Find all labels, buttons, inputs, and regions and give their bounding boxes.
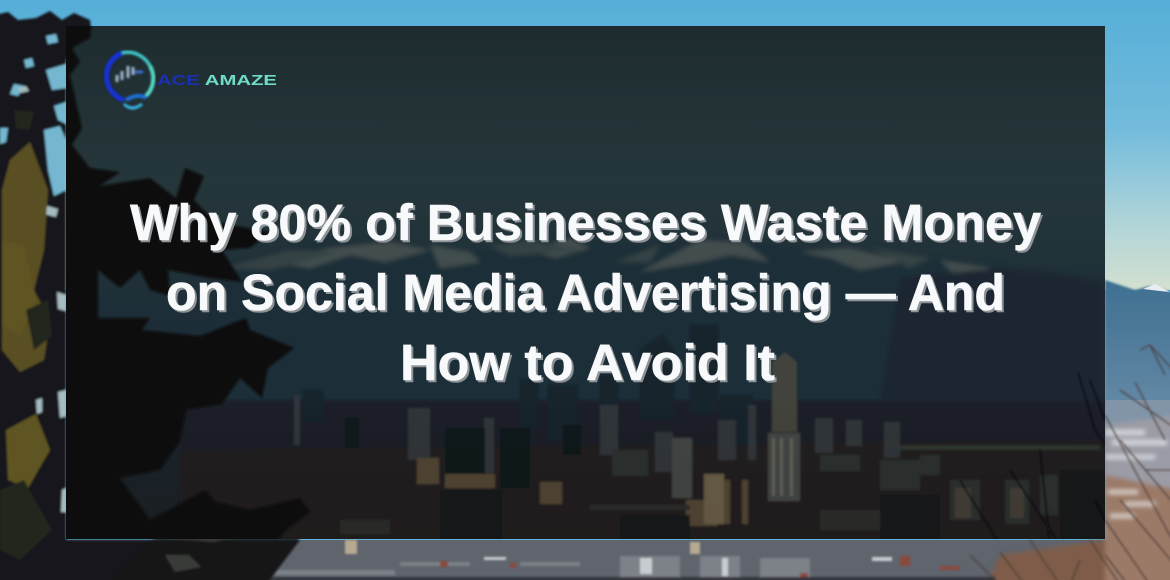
logo: Ace Amaze (106, 52, 277, 108)
logo wordmark: ACE AMAZE (157, 72, 277, 89)
tree: bare branches right (970, 345, 1170, 580)
title: Why 80% of Businesses Waste Money (130, 194, 1042, 251)
tree: left conifer outside panel (0, 11, 312, 580)
panel: dark translucent overlay (66, 26, 1105, 539)
bare branches through panel (960, 372, 1105, 545)
logo ring icon (106, 52, 153, 108)
title: How to Avoid It (400, 334, 775, 391)
mountains (229, 237, 1103, 398)
tree silhouette through panel (60, 20, 310, 550)
title: on Social Media Advertising — And (166, 264, 1005, 321)
title (130, 194, 1042, 391)
city skyline (180, 325, 1120, 550)
